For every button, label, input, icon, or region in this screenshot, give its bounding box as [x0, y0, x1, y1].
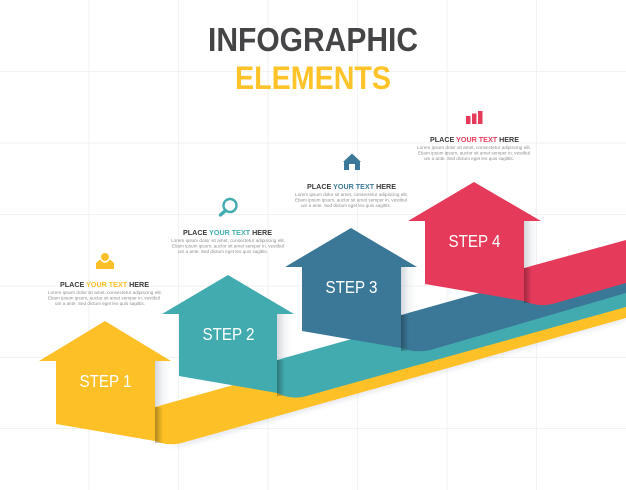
- text block: step 3: [295, 182, 408, 209]
- text block: step 4: um a ante. Sed dictum eget leo quis sagittis.: [424, 156, 514, 162]
- arrow: step 4: STEP 4: [448, 231, 501, 251]
- text block: step 4: Etiam ipsum ipsum, auctor sit amet semper in, vestibul: [418, 150, 530, 156]
- arrow: step 1: STEP 1: [80, 371, 132, 391]
- shadow: step 1: [155, 361, 170, 407]
- arrow: step 2: STEP 2: [202, 324, 254, 344]
- ribbon: yellow: [155, 275, 626, 444]
- shadow: step 4: [524, 221, 539, 268]
- text block: step 4: Lorem ipsum dolor sit amet, consectetur adipiscing elit.: [417, 145, 531, 151]
- text block: step 2: Etiam ipsum ipsum, auctor sit amet semper in, vestibul: [172, 244, 284, 250]
- title: ELEMENTS: [235, 60, 391, 96]
- arrow: step 1: [39, 321, 171, 441]
- text block: step 1: Etiam ipsum ipsum, auctor sit amet semper in, vestibul: [48, 296, 160, 302]
- text block: step 1: um a ante. Sed dictum eget leo quis sagittis.: [55, 301, 145, 307]
- ribbon: red: [524, 240, 626, 305]
- ribbon: teal: [277, 262, 626, 398]
- text block: step 4: PLACE YOUR TEXT HERE: [430, 135, 519, 144]
- icon: person: [96, 253, 114, 269]
- text block: step 2: [171, 228, 285, 255]
- text block: step 4: [417, 135, 531, 162]
- icon: magnifier: [220, 199, 236, 215]
- icon: house: [343, 154, 361, 170]
- ribbon: blue: [401, 252, 626, 351]
- arrow: step 4: [408, 182, 541, 301]
- text block: step 3: Etiam ipsum ipsum, auctor sit amet semper in, vestibul: [295, 198, 407, 204]
- text block: step 1: [48, 280, 162, 307]
- text block: step 1: PLACE YOUR TEXT HERE: [60, 280, 149, 289]
- shadow: step 3: [401, 267, 416, 315]
- text block: step 2: um a ante. Sed dictum eget leo quis sagittis.: [178, 249, 268, 255]
- text block: step 2: PLACE YOUR TEXT HERE: [183, 228, 272, 237]
- text block: step 3: PLACE YOUR TEXT HERE: [307, 182, 396, 191]
- text block: step 3: um a ante. Sed dictum eget leo quis sagittis.: [301, 203, 391, 209]
- title: INFOGRAPHIC: [208, 22, 418, 59]
- arrow: step 3: STEP 3: [326, 277, 378, 297]
- arrow: step 3: [285, 228, 417, 348]
- arrow: step 2: [162, 275, 294, 393]
- text block: step 3: Lorem ipsum dolor sit amet, consectetur adipiscing elit.: [295, 192, 408, 198]
- text block: step 2: Lorem ipsum dolor sit amet, consectetur adipiscing elit.: [171, 238, 285, 244]
- text block: step 1: Lorem ipsum dolor sit amet, consectetur adipiscing elit.: [48, 290, 162, 296]
- shadow: step 2: [277, 314, 292, 360]
- title: [208, 22, 418, 96]
- ribbon shadow: [172, 316, 626, 447]
- icon: bars: [466, 111, 482, 124]
